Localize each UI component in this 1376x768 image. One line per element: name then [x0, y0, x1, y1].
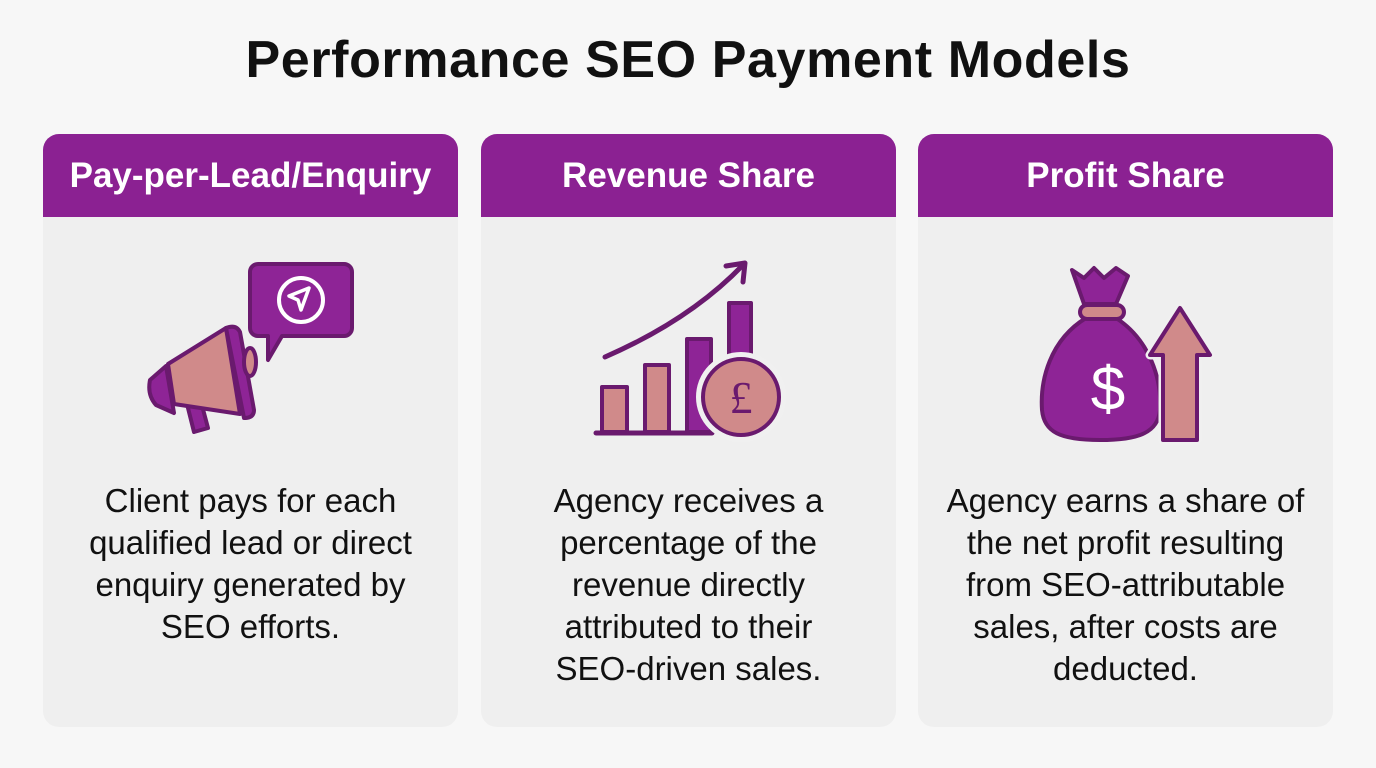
text: revenue share description: percentage of the [560, 524, 817, 561]
title: Performance SEO Payment Models [246, 31, 1130, 89]
text: revenue share description: Agency receives a [554, 482, 823, 519]
text: profit share description: the net profit resulting [967, 524, 1284, 561]
text: pay-per-lead description: enquiry generated by [95, 566, 406, 603]
panel: revenue share [481, 134, 896, 727]
text: revenue share description: revenue directly [572, 566, 805, 603]
header: revenue share [481, 134, 896, 217]
text: pay-per-lead description: Client pays for each [105, 482, 396, 519]
header: pay-per-lead [43, 134, 458, 217]
text: revenue share description [554, 482, 824, 687]
header: profit share [918, 134, 1333, 217]
text: profit share description: Agency earns a share of [947, 482, 1304, 519]
icon: bar chart with pound coin [594, 260, 781, 437]
text: profit share description [946, 482, 1304, 687]
panel: pay-per-lead [43, 134, 458, 727]
header: revenue share: Revenue Share [562, 156, 815, 195]
text: pay-per-lead description [89, 482, 412, 645]
text: profit share description: sales, after costs are [973, 608, 1278, 645]
header: profit share: Profit Share [1026, 156, 1225, 195]
text: profit share description: from SEO-attributable [966, 566, 1285, 603]
icon: money bag with arrow: $ [1091, 355, 1125, 424]
text: revenue share description: attributed to their [565, 608, 812, 645]
text: profit share description: deducted. [1053, 650, 1198, 687]
panel: profit share [918, 134, 1333, 727]
icon: megaphone with speech bubble [147, 262, 354, 434]
text: revenue share description: SEO-driven sales. [556, 650, 821, 687]
icon: bar chart with pound coin: £ [730, 372, 752, 423]
header: pay-per-lead: Pay-per-Lead/Enquiry [70, 156, 431, 195]
text: pay-per-lead description: SEO efforts. [161, 608, 340, 645]
icon: money bag with arrow [1040, 266, 1212, 442]
text: pay-per-lead description: qualified lead or direct [89, 524, 412, 561]
